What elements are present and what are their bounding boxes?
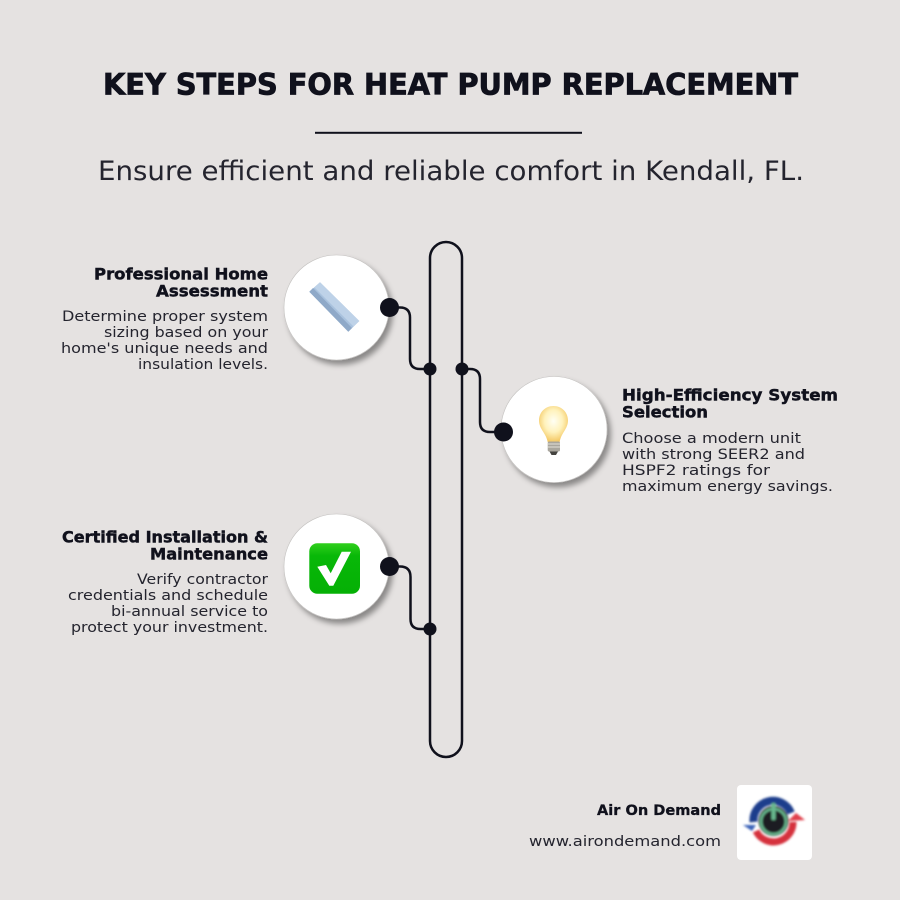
step 1 text: home's unique needs and [61, 341, 268, 357]
step 3 timeline dot [424, 622, 436, 636]
step 3: certified installation and maintenance [62, 514, 436, 636]
step 3 text: Verify contractor [137, 572, 268, 588]
step 1 text: Professional Home [94, 264, 268, 284]
step 3 text: Certified Installation & [62, 528, 268, 546]
step 1 text: Determine proper system [62, 309, 268, 325]
step 1 text: sizing based on your [104, 325, 268, 341]
step 2 text: Selection [622, 402, 708, 422]
step 3 text: Maintenance [150, 544, 268, 564]
step 3 text: credentials and schedule [68, 588, 268, 604]
step 2 node [494, 422, 513, 442]
step 2 text: with strong SEER2 and [622, 447, 805, 463]
title: KEY STEPS FOR HEAT PUMP REPLACEMENT [103, 68, 798, 102]
step 2 text: High-Efficiency System [622, 386, 838, 404]
step 2 text: maximum energy savings. [622, 479, 833, 495]
step 3 text [62, 528, 268, 636]
step 3 circle [284, 514, 389, 619]
step 2 text: HSPF2 ratings for [622, 463, 770, 479]
step 1 text: Assessment [156, 282, 268, 300]
footer brand name: Air On Demand [597, 803, 721, 819]
step 3 text: protect your investment. [71, 620, 268, 636]
step 3 node [380, 557, 399, 576]
icon: ruler [309, 282, 359, 332]
step 2 timeline dot [456, 362, 468, 376]
step 2 text: Choose a modern unit [622, 431, 801, 447]
step 1: professional home assessment [61, 255, 436, 376]
step 1 text [61, 264, 268, 373]
subtitle: Ensure efficient and reliable comfort in Kendall, FL. [98, 156, 804, 187]
step 1 circle [284, 255, 389, 360]
step 2: high-efficiency system selection [456, 362, 838, 495]
logo [737, 785, 812, 860]
icon: light bulb [539, 406, 568, 455]
step 1 text: insulation levels. [138, 357, 268, 373]
timeline capsule [430, 242, 462, 757]
step 1 node [380, 298, 399, 317]
step 1 timeline dot [424, 362, 436, 376]
step 2 connector [462, 369, 504, 432]
step 1 connector [390, 308, 430, 369]
step 3 text: bi-annual service to [111, 604, 268, 620]
step 3 connector [390, 566, 430, 629]
step 2 text [622, 386, 838, 495]
footer website: www.airondemand.com [529, 834, 721, 850]
step 2 circle [501, 376, 607, 482]
icon: check mark [309, 543, 360, 594]
